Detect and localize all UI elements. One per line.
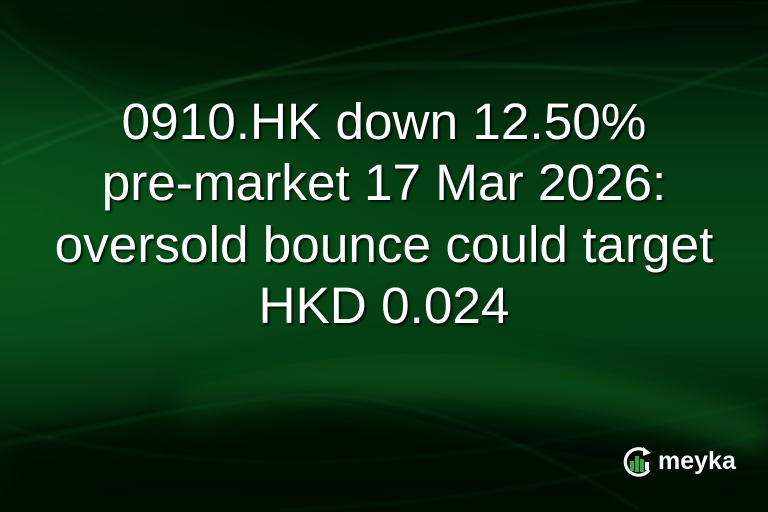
logo wordmark: meyka: [658, 447, 736, 475]
title: [55, 93, 716, 334]
title: 0910.HK down 12.50%: [122, 93, 646, 150]
logo: meyka: [624, 447, 736, 477]
title: HKD 0.024: [259, 277, 509, 334]
title: oversold bounce could target: [55, 216, 713, 273]
icon: circular arrow with bars: [624, 447, 651, 477]
title: pre-market 17 Mar 2026:: [102, 154, 666, 211]
